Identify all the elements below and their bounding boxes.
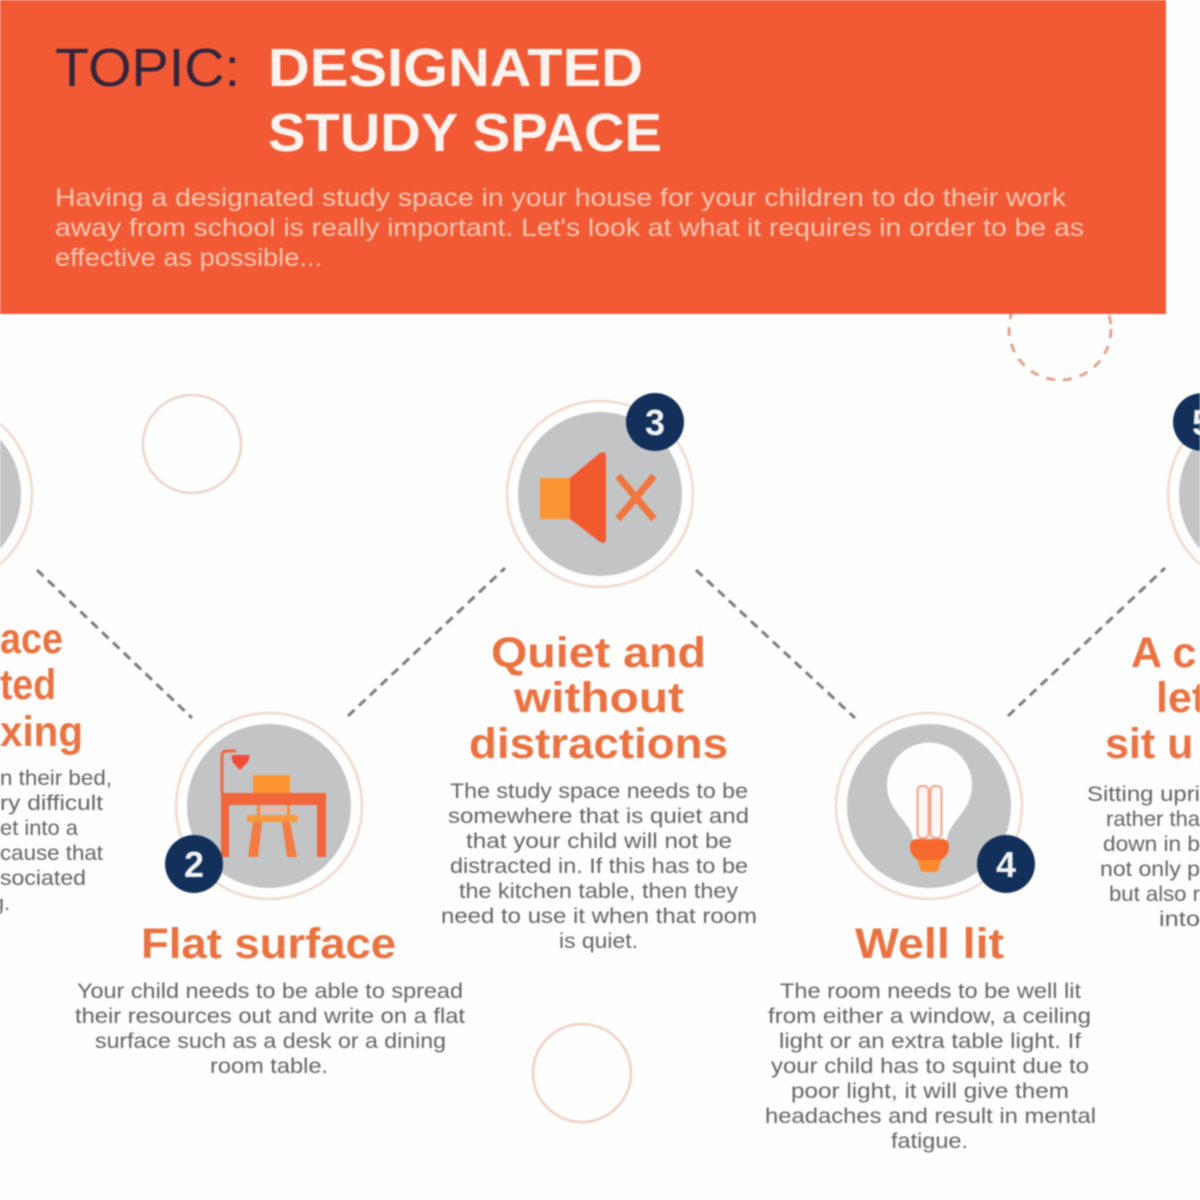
step 1 body (cropped): ry difficult	[0, 792, 103, 815]
step 2 heading: Flat surface	[141, 920, 396, 968]
intro text	[55, 184, 1084, 272]
step 2 body	[75, 980, 465, 1078]
title: DESIGNATED	[268, 38, 643, 98]
step 5 body (cropped)	[1087, 783, 1200, 931]
badge 5	[1173, 393, 1200, 451]
dashed connectors	[37, 568, 1165, 718]
step 1 circle (cropped)	[0, 401, 32, 587]
step 4 circle	[836, 713, 1035, 899]
icon: light bulb	[887, 742, 972, 872]
step 1 heading (cropped)	[0, 615, 83, 756]
step 4 body: The room needs to be well lit	[780, 980, 1081, 1003]
step 2 body: their resources out and write on a flat	[75, 1005, 465, 1028]
step 1 body (cropped): sociated	[0, 867, 86, 890]
step 3 body: the kitchen table, then they	[459, 880, 739, 903]
step 4 heading: Well lit	[855, 920, 1004, 968]
intro text: Having a designated study space in your house for your children to do their work	[55, 184, 1067, 212]
step 5 body (cropped): not only p	[1100, 858, 1200, 881]
step 5 heading (cropped): sit u	[1105, 720, 1193, 768]
step 1 body (cropped)	[0, 767, 112, 915]
step 3 heading: distractions	[469, 720, 728, 768]
step 3 circle	[507, 393, 693, 587]
badge 2: 2	[184, 844, 204, 885]
step 2 body: surface such as a desk or a dining	[95, 1030, 446, 1053]
step 1 body (cropped): cause that	[0, 842, 103, 865]
badge 3: 3	[645, 402, 665, 443]
step 4 body: your child has to squint due to	[771, 1055, 1089, 1078]
badge 4	[977, 835, 1035, 893]
step 3 body: somewhere that is quiet and	[448, 805, 749, 828]
step 3 body: that your child will not be	[466, 830, 732, 853]
title: STUDY SPACE	[268, 103, 662, 163]
intro text: effective as possible...	[55, 244, 322, 272]
step 3 body: The study space needs to be	[450, 780, 748, 803]
step 3 body	[441, 780, 757, 953]
header banner	[0, 0, 1166, 314]
step 4 body	[765, 980, 1096, 1153]
step 4 body: light or an extra table light. If	[779, 1030, 1081, 1053]
step 5 body (cropped): but also r	[1109, 883, 1200, 906]
title: TOPIC:	[55, 38, 240, 98]
decorative circle left	[143, 395, 241, 493]
step 3 body: is quiet.	[559, 930, 638, 953]
step 4 body: headaches and result in mental	[765, 1105, 1096, 1128]
step 3 heading	[469, 629, 728, 768]
badge 3	[626, 393, 684, 451]
step 1 body (cropped): et into a	[0, 817, 78, 840]
step 4 body: from either a window, a ceiling	[768, 1005, 1091, 1028]
step 3 body: distracted in. If this has to be	[450, 855, 748, 878]
step 3 heading: without	[513, 674, 684, 722]
step 5 body (cropped): into	[1159, 908, 1200, 931]
step 4 body: poor light, it will give them	[791, 1080, 1069, 1103]
title	[55, 38, 662, 163]
decorative circle bottom	[533, 1024, 631, 1122]
step 3 body: need to use it when that room	[441, 905, 757, 928]
step 2 circle	[165, 713, 362, 899]
decorative dashed circle	[1009, 278, 1111, 380]
step 1 heading (cropped): ted	[0, 661, 56, 709]
step 3 heading: Quiet and	[491, 629, 706, 677]
badge 4: 4	[996, 844, 1016, 885]
step 5 circle (cropped)	[1168, 393, 1200, 587]
icon: desk and lamp	[221, 751, 326, 857]
step 4 body: fatigue.	[891, 1130, 968, 1153]
step 2 body: Your child needs to be able to spread	[77, 980, 463, 1003]
intro text: away from school is really important. Let's look at what it requires in order to be as	[55, 214, 1084, 242]
badge 2	[165, 835, 223, 893]
step 1 body (cropped): n their bed,	[0, 767, 112, 790]
step 1 heading (cropped): ace	[0, 615, 63, 663]
step 5 body (cropped): down in b	[1103, 833, 1200, 856]
step 2 body: room table.	[210, 1055, 328, 1078]
step 5 heading (cropped)	[1105, 629, 1200, 768]
step 5 body (cropped): Sitting upri	[1087, 783, 1200, 806]
step 1 heading (cropped): xing	[0, 708, 83, 756]
icon: muted speaker	[540, 452, 654, 543]
step 5 heading (cropped): A c	[1131, 629, 1196, 677]
step 5 body (cropped): rather tha	[1106, 808, 1200, 831]
